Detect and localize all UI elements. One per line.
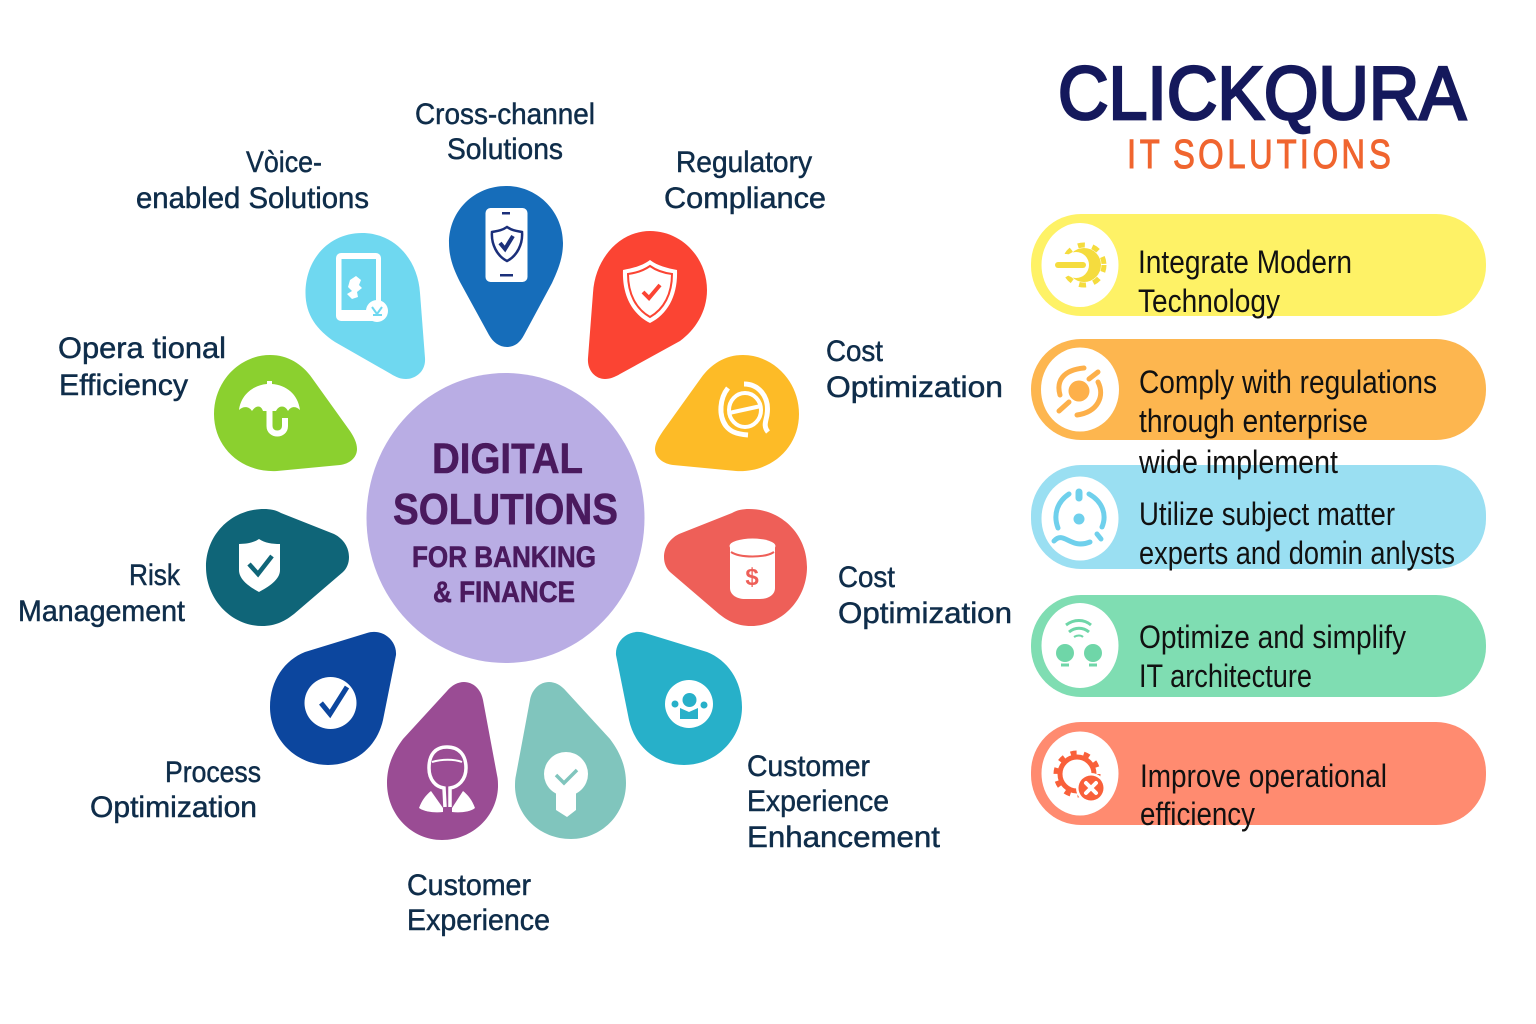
- panel: pill Utilize subject matter experts: experts and domin anlysts: [1139, 535, 1455, 571]
- label: Operational Efficiency: Opera tional: [58, 332, 226, 365]
- panel: petal Operational Efficiency: [214, 355, 357, 471]
- panel: pill Integrate Modern Technology: [1031, 214, 1486, 319]
- label: Cost Optimization lower: [838, 561, 1012, 630]
- panel: petal Cost Optimization lower: $: [745, 564, 759, 591]
- label: Cross-channel Solutions: Cross-channel: [415, 98, 595, 131]
- panel: pill Comply with regulations: [1031, 339, 1486, 440]
- label: Cost Optimization lower: Cost: [838, 561, 896, 594]
- panel: pill Integrate Modern Technology: Technology: [1138, 283, 1280, 319]
- label: Cost Optimization upper: Cost: [826, 335, 884, 368]
- label: Customer Experience Enhancement: [747, 750, 941, 854]
- panel: pill Improve operational efficiency: [1031, 722, 1486, 832]
- panel: petal Customer Experience: [387, 682, 498, 840]
- panel: pill Improve operational efficiency: Improve operational: [1140, 758, 1387, 794]
- icon: gear with arrow: [1055, 245, 1104, 285]
- label: Operational Efficiency: Efficiency: [59, 369, 188, 402]
- label: Customer Experience: Experience: [407, 904, 550, 937]
- center circle: SOLUTIONS: [393, 485, 618, 534]
- panel: pill Comply with regulations: Comply with regulations: [1139, 364, 1437, 400]
- label: Operational Efficiency: [58, 332, 226, 402]
- label: Risk Management: Risk: [129, 559, 181, 592]
- center circle: DIGITAL: [432, 435, 583, 483]
- label: Process Optimization: Process: [165, 756, 261, 789]
- label: Regulatory Compliance: Regulatory: [676, 146, 812, 179]
- label: Cost Optimization lower: Optimization: [838, 597, 1012, 630]
- panel: pill Utilize subject matter experts: [1031, 465, 1486, 571]
- panel: pill Integrate Modern Technology: Integrate Modern: [1138, 244, 1352, 280]
- center circle: [366, 373, 644, 663]
- label: Process Optimization: Optimization: [90, 791, 257, 824]
- panel: petal Voice-enabled Solutions: [306, 233, 425, 379]
- label: Customer Experience: [407, 869, 550, 937]
- panel: pill Optimize IT architecture: IT architecture: [1139, 658, 1312, 694]
- label: Risk Management: Management: [18, 595, 186, 628]
- center circle: FOR BANKING: [412, 541, 596, 574]
- icon: wifi and bulbs: [1056, 620, 1102, 665]
- panel: petal Regulatory Compliance: [588, 231, 707, 379]
- panel: petal Cost Optimization upper: [655, 355, 799, 471]
- label: Cost Optimization upper: [826, 335, 1003, 404]
- label: Voice-enabled Solutions: enabled Solutions: [136, 182, 369, 215]
- center circle: & FINANCE: [433, 576, 575, 609]
- label: Regulatory Compliance: [664, 146, 826, 215]
- label: Customer Experience Enhancement: Customer: [747, 750, 870, 783]
- panel: petal Customer Experience 2: [515, 682, 626, 839]
- panel: petal Cost Optimization lower: [664, 509, 807, 626]
- icon: orbit target: [1059, 368, 1101, 415]
- text: wide implement overflow line: wide implement: [1138, 444, 1338, 480]
- panel: petal Risk Management: [206, 509, 349, 626]
- logo subtitle: IT SOLUTIONS: IT SOLUTIONS: [1127, 130, 1391, 177]
- panel: petal Process Optimization: [270, 632, 396, 765]
- label: Customer Experience Enhancement: Enhancement: [747, 821, 941, 854]
- icon: gear with x badge: [1056, 753, 1106, 803]
- label: Cross-channel Solutions: [415, 98, 595, 166]
- panel: pill Comply with regulations: through enterprise: [1139, 403, 1368, 439]
- label: Cost Optimization upper: Optimization: [826, 371, 1003, 404]
- label: Risk Management: [18, 559, 186, 628]
- logo: CLICKQURA: CLICKQURA: [1058, 51, 1466, 135]
- label: Voice-enabled Solutions: [136, 146, 369, 215]
- label: Voice-enabled Solutions: Vòice-: [246, 146, 322, 179]
- label: Customer Experience: Customer: [407, 869, 531, 902]
- panel: petal Customer Experience Enhancement: [616, 632, 742, 765]
- label: Process Optimization: [90, 756, 261, 824]
- icon: circular nodes: [1054, 492, 1104, 544]
- panel: pill Improve operational efficiency: efficiency: [1140, 796, 1255, 832]
- label: Regulatory Compliance: Compliance: [664, 182, 826, 215]
- label: Customer Experience Enhancement: Experience: [747, 785, 889, 818]
- panel: pill Optimize IT architecture: [1031, 595, 1486, 697]
- panel: pill Utilize subject matter experts: Utilize subject matter: [1139, 496, 1395, 532]
- panel: petal Cross-channel Solutions: [449, 186, 563, 347]
- panel: pill Optimize IT architecture: Optimize and simplify: [1139, 619, 1406, 655]
- label: Cross-channel Solutions: Solutions: [447, 133, 563, 166]
